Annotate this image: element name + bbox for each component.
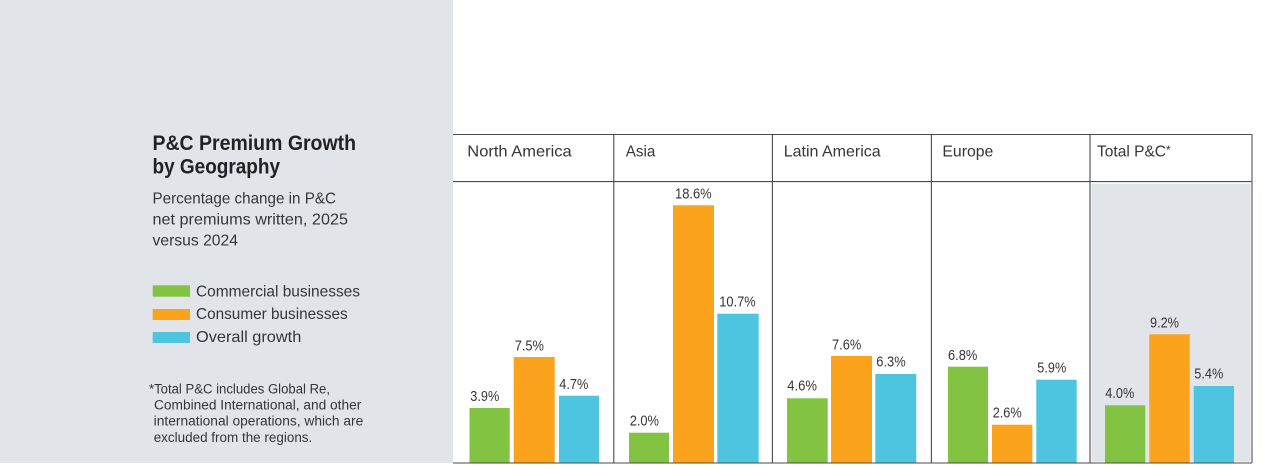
region: Latin America: Latin America bbox=[784, 143, 881, 160]
footnote: *Total P&C includes Global Re, bbox=[149, 381, 330, 396]
panel: total background shading bbox=[1091, 184, 1251, 462]
footnote: international operations, which are bbox=[154, 414, 363, 429]
region: North America: 7.5% bbox=[515, 338, 544, 354]
footnote bbox=[149, 381, 363, 445]
legend bbox=[153, 284, 360, 346]
region: Total P&C: Total P&C bbox=[1097, 143, 1166, 160]
region: North America bbox=[467, 143, 599, 462]
panel: title and legend bbox=[0, 0, 453, 463]
region: Total P&C: 4.0% bbox=[1105, 386, 1134, 402]
footnote: excluded from the regions. bbox=[154, 430, 312, 445]
region: Total P&C: * bbox=[1166, 143, 1171, 157]
region: Latin America: 6.3% bbox=[876, 354, 906, 370]
subtitle: versus 2024 bbox=[152, 232, 238, 249]
title: by Geography bbox=[152, 156, 280, 178]
region: Latin America: 7.6% bbox=[832, 338, 861, 354]
legend item: consumer businesses: Consumer businesses bbox=[196, 306, 348, 323]
region: North America: North America bbox=[467, 143, 572, 160]
legend item: overall growth bbox=[153, 329, 301, 346]
region: Asia: 2.0% bbox=[630, 414, 659, 430]
region: Asia: 18.6% bbox=[675, 187, 712, 203]
region: Total P&C bbox=[1097, 143, 1234, 462]
region: Asia bbox=[626, 143, 759, 462]
chart table grid bbox=[453, 134, 1252, 463]
region: Asia: 10.7% bbox=[719, 295, 756, 311]
region: North America: 3.9% bbox=[470, 389, 499, 405]
subtitle: net premiums written, 2025 bbox=[152, 211, 348, 228]
region: Latin America bbox=[784, 143, 916, 462]
subtitle: Percentage change in P&C bbox=[152, 190, 336, 207]
region: Europe: 5.9% bbox=[1037, 360, 1066, 376]
legend item: overall growth: Overall growth bbox=[196, 329, 301, 346]
region: Asia: Asia bbox=[626, 143, 655, 160]
region: Europe: 6.8% bbox=[948, 348, 977, 364]
region: North America: 4.7% bbox=[559, 377, 588, 393]
region: Europe: 2.6% bbox=[993, 405, 1022, 421]
legend item: commercial businesses: Commercial businesses bbox=[196, 284, 360, 301]
region: Total P&C: 9.2% bbox=[1150, 316, 1179, 332]
subtitle bbox=[152, 190, 348, 249]
region: Latin America: 4.6% bbox=[787, 379, 817, 395]
footnote: Combined International, and other bbox=[154, 398, 362, 413]
region: Total P&C: 5.4% bbox=[1194, 367, 1223, 383]
title bbox=[152, 132, 356, 178]
title: P&C Premium Growth bbox=[152, 132, 356, 155]
region: Europe bbox=[942, 143, 1077, 462]
region: Europe: Europe bbox=[942, 143, 993, 160]
